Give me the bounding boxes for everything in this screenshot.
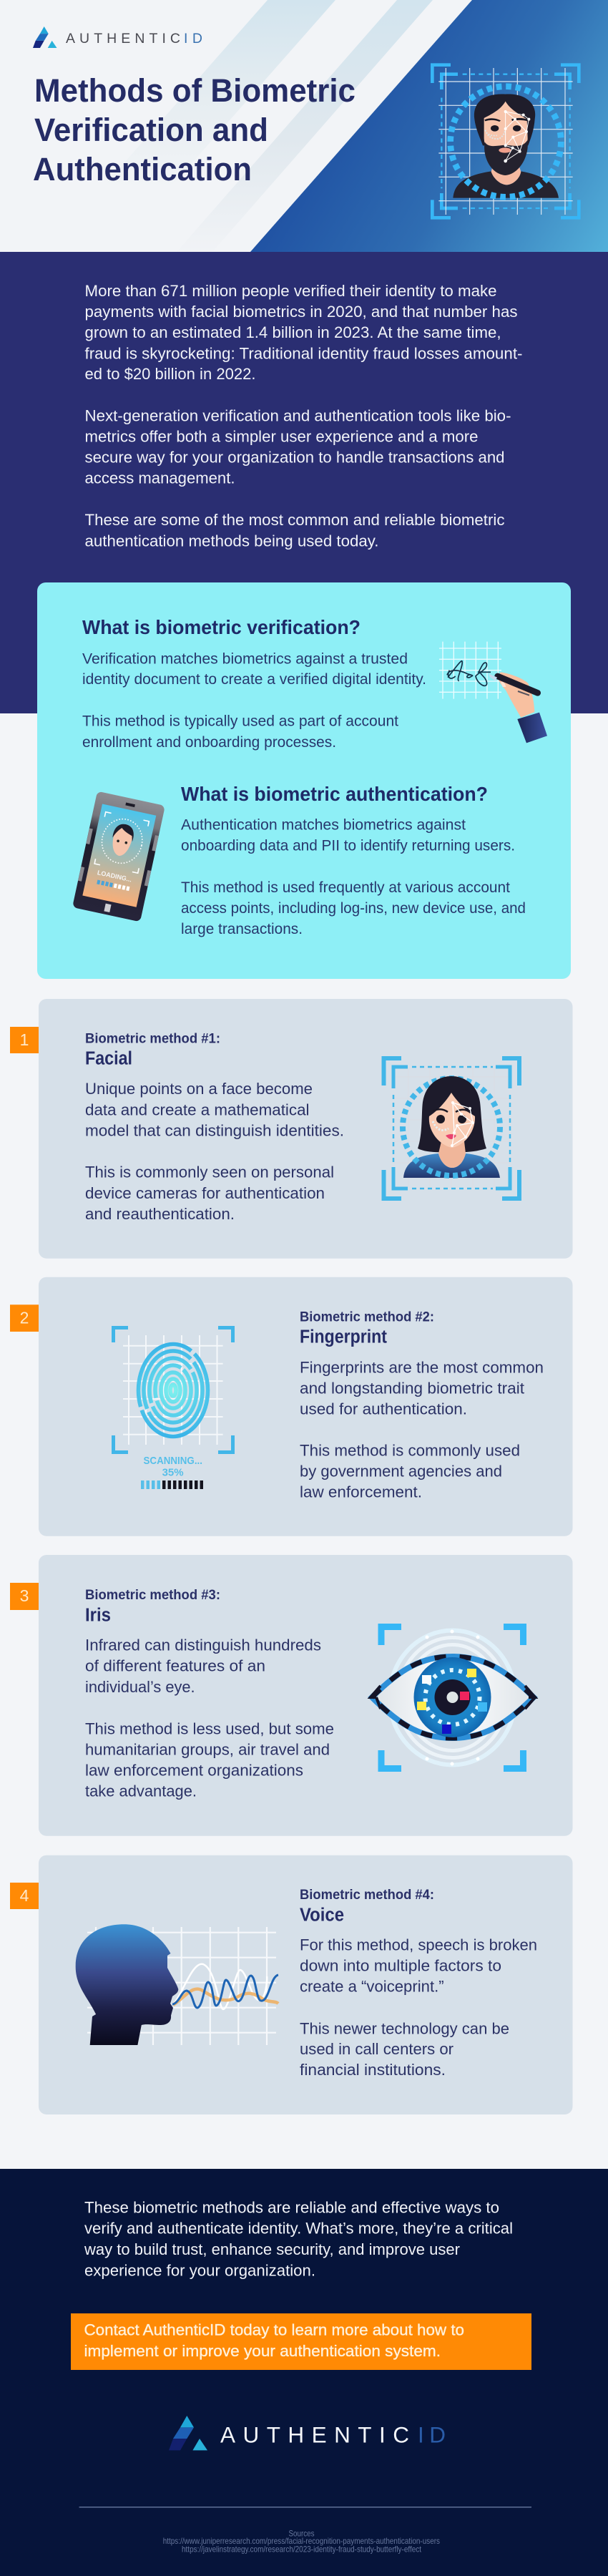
text block: facial description [85,1080,344,1223]
icon: hand signing on grid [439,642,547,743]
text block: authentication description: access points, including log-ins, new device use, and [181,899,526,917]
badge: number 1: 1 [20,1030,29,1049]
text block: verification description: identity document to create a verified digital identity. [82,670,426,688]
text block: closing paragraph: experience for your organization. [84,2261,315,2280]
badge: number 4: 4 [20,1886,29,1905]
text block: iris description: law enforcement organizations [85,1762,303,1780]
text block: voice description: This newer technology can be [300,2019,509,2037]
text block: voice description: For this method, speech is broken [300,1936,537,1954]
text block: facial description: device cameras for authentication [85,1184,325,1202]
text block: intro paragraph 1 [84,282,522,383]
panel: method 4 voice [10,1855,572,2114]
text block: intro paragraph 3: These are some of the most common and reliable biometric [84,511,505,529]
text block: intro paragraph 2: metrics offer both a simpler user experience and a more [84,428,478,446]
text block: facial description: Unique points on a face become [85,1080,313,1098]
text block: fingerprint description: by government agencies and [300,1462,502,1480]
logo: AuthenticID footer: AUTHENTIC [220,2422,409,2448]
heading: Fingerprint: Fingerprint [300,1327,387,1347]
icon: woman's face scan [383,1058,519,1199]
logo: AuthenticID header: ID [184,31,202,47]
logo: AuthenticID footer: ID [418,2422,446,2448]
text block: iris description: individual’s eye. [85,1678,195,1696]
text block: intro paragraph 2: Next-generation verification and authentication tools like bio- [84,406,511,424]
text block: voice description: used in call centers or [300,2040,453,2058]
sources [163,2528,440,2554]
text block: iris description: take advantage. [85,1782,197,1800]
label: method 2: Biometric method #2: [300,1310,434,1325]
text block: closing paragraph: way to build trust, enhance security, and improve user [84,2240,460,2258]
text block: intro paragraph 1: grown to an estimated 1.4 billion in 2023. At the same time, [84,323,501,341]
text block: intro paragraph 1: fraud is skyrocketing: Traditional identity fraud losses amount- [84,344,522,362]
icon: man's face scan [432,65,579,218]
hero header panel [0,0,608,252]
text block: voice description [300,1936,537,2079]
text block: fingerprint description: law enforcement. [300,1483,422,1501]
label: method 1: Biometric method #1: [85,1032,220,1047]
badge: number 2: 2 [20,1308,29,1327]
sources: Sources [289,2528,315,2538]
text block: closing paragraph [84,2198,513,2280]
icon: fingerprint scanner: SCANNING... [143,1455,202,1467]
label: method 4: Biometric method #4: [300,1888,434,1903]
text block: intro paragraph 3 [84,511,505,550]
logo: AuthenticID header: AUTHENTIC [66,31,180,47]
text block: authentication description: onboarding data and PII to identify returning users. [181,837,515,854]
text block: voice description: financial institutions. [300,2061,446,2079]
icon: eye iris scan [371,1627,535,1769]
text block: verification description [82,650,426,751]
panel: verification and authentication definitions [37,582,571,979]
heading: Voice: Voice [300,1905,344,1925]
text block: voice description: down into multiple factors to [300,1956,501,1974]
text block: intro paragraph 2 [84,406,511,487]
badge: number 4 [10,1883,39,1909]
text block: iris description: This method is less used, but some [85,1719,334,1737]
text block: iris description: of different features of an [85,1657,265,1675]
icon: phone with face recognition [72,791,165,922]
panel: intro navy band [0,252,608,713]
badge: number 3: 3 [20,1586,29,1605]
sources: https://www.juniperresearch.com/press/facial-recognition-payments-authentication-users [163,2536,440,2546]
icon: phone with face recognition: LOADING... [97,869,132,883]
panel: method 2 fingerprint [10,1277,572,1536]
text block: fingerprint description: used for authentication. [300,1400,467,1418]
text block: facial description: model that can distinguish identities. [85,1121,344,1139]
heading: Facial: Facial [85,1049,132,1069]
text block: closing paragraph: These biometric methods are reliable and effective ways to [84,2198,499,2217]
callout: contact call to action: implement or improve your authentication system. [84,2342,441,2360]
text block: authentication description [181,816,526,937]
text block: facial description: This is commonly seen on personal [85,1163,334,1181]
title: Verification and [34,112,268,148]
text block: verification description: enrollment and onboarding processes. [82,733,336,751]
text block: iris description [85,1636,334,1800]
text block: intro paragraph 1: More than 671 million people verified their identity to make [84,282,496,300]
icon: fingerprint scanner: 35% [162,1467,184,1479]
icon: head with voice waves [76,1924,278,2045]
label: method 3: Biometric method #3: [85,1588,220,1603]
text block: authentication description: Authentication matches biometrics against [181,816,466,834]
text block: intro paragraph 3: authentication methods being used today. [84,532,379,550]
text block: fingerprint description: Fingerprints are the most common [300,1358,544,1376]
heading: Iris: Iris [85,1606,111,1626]
badge: number 3 [10,1583,39,1610]
text block: fingerprint description: and longstanding biometric trait [300,1379,524,1397]
callout: contact call to action: Contact AuthenticID today to learn more about how to [84,2321,464,2338]
text block: iris description: Infrared can distinguish hundreds [85,1636,321,1654]
panel: footer [0,2169,608,2576]
heading: what is biometric authentication: What is biometric authentication? [181,783,488,805]
heading: what is biometric verification: What is biometric verification? [82,616,361,638]
panel: method 3 iris [10,1555,572,1836]
text block: verification description: This method is typically used as part of account [82,713,398,730]
text block: facial description: and reauthentication. [85,1205,235,1223]
text block: intro paragraph 2: access management. [84,469,235,487]
text block: intro paragraph 1: payments with facial biometrics in 2020, and that number has [84,303,518,321]
text block: fingerprint description: This method is commonly used [300,1441,520,1459]
text block: voice description: create a “voiceprint.” [300,1978,444,1996]
text block: fingerprint description [300,1358,544,1501]
text block: intro paragraph 2: secure way for your organization to handle transactions and [84,449,505,467]
title: Methods of Biometric [34,72,356,109]
text block: authentication description: large transactions. [181,920,303,937]
title [33,72,356,187]
callout: contact call to action [71,2313,531,2370]
text block: verification description: Verification matches biometrics against a trusted [82,650,408,668]
badge: number 1 [10,1027,39,1053]
icon: fingerprint scanner [113,1328,233,1489]
text block: iris description: humanitarian groups, air travel and [85,1741,330,1759]
text block: authentication description: This method is used frequently at various account [181,879,510,896]
text block: intro paragraph 1: ed to $20 billion in 2022. [84,365,256,383]
logo: AuthenticID header [33,26,202,48]
badge: number 2 [10,1304,39,1332]
logo: AuthenticID footer [169,2416,446,2450]
title: Authentication [33,151,252,187]
text block: facial description: data and create a mathematical [85,1101,309,1118]
sources: https://javelinstrategy.com/research/2023-identity-fraud-study-butterfly-effect [182,2544,422,2554]
text block: closing paragraph: verify and authenticate identity. What’s more, they’re a critical [84,2220,513,2238]
panel: method 1 facial [10,999,572,1259]
